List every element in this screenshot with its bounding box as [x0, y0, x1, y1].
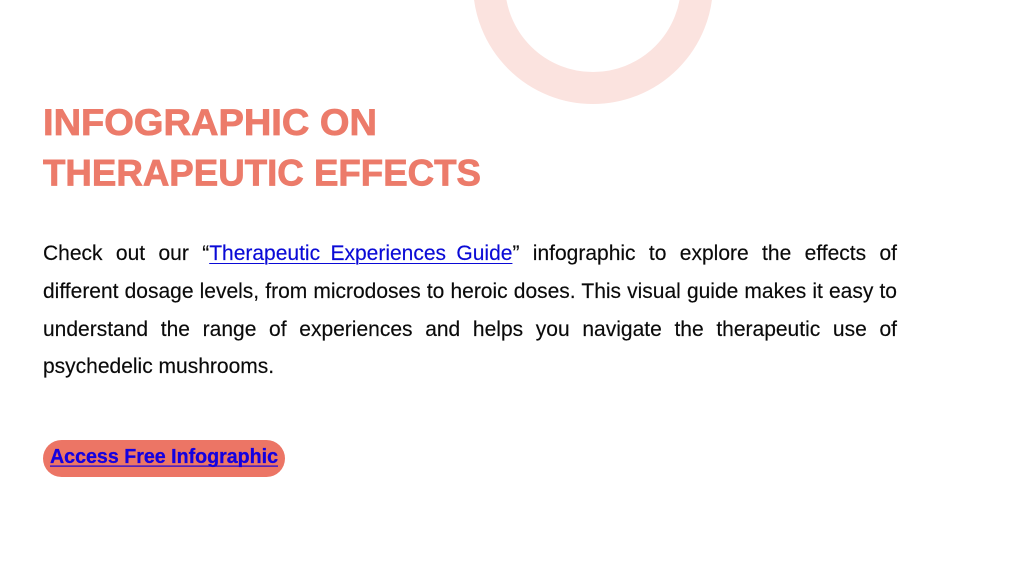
- button: access free infographic: Access Free Infographic: [50, 446, 278, 468]
- description text: understand the range of experiences and helps you navigate the therapeutic use of: [43, 318, 897, 341]
- description text: psychedelic mushrooms.: [43, 355, 274, 378]
- description text: [43, 242, 898, 378]
- button: access free infographic: [43, 440, 285, 477]
- description text: different dosage levels, from microdoses to heroic doses. This visual guide makes it easy to: [43, 280, 897, 303]
- title: THERAPEUTIC EFFECTS: [43, 152, 481, 194]
- title: INFOGRAPHIC ON: [43, 102, 377, 143]
- description text: Check out our “Therapeutic Experiences Guide” infographic to explore the effects of: [43, 242, 897, 265]
- title: [43, 102, 481, 194]
